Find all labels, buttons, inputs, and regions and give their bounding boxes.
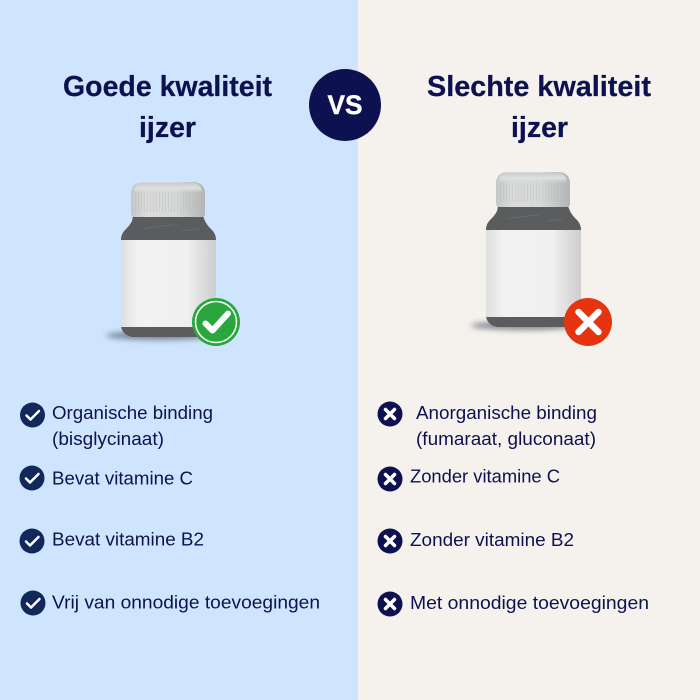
item: organic binding: (bisglycinaat)	[52, 429, 164, 449]
item: no vitamin B2: Zonder vitamine B2	[410, 530, 574, 550]
heading: good quality	[63, 71, 272, 144]
list: good quality points	[20, 402, 320, 616]
heading: good quality: Goede kwaliteit	[63, 71, 272, 103]
item: with unnecessary additives: Met onnodige toevoegingen	[410, 593, 649, 613]
item: inorganic binding	[378, 402, 597, 449]
item: vitamin C: Bevat vitamine C	[52, 468, 193, 488]
heading: bad quality: ijzer	[511, 112, 568, 144]
item: organic binding	[20, 402, 213, 449]
item: organic binding: Organische binding	[52, 403, 213, 423]
heading: good quality: ijzer	[139, 112, 196, 144]
badge: VS	[309, 69, 381, 141]
heading: bad quality: Slechte kwaliteit	[427, 71, 651, 103]
panel: good quality background	[0, 0, 358, 700]
item: no unnecessary additives: Vrij van onnodige toevoegingen	[52, 592, 320, 612]
icon: green check badge	[192, 298, 240, 346]
item: inorganic binding: Anorganische binding	[416, 403, 597, 423]
heading: bad quality	[427, 71, 651, 144]
icon: red cross badge	[564, 298, 612, 346]
item: no vitamin C	[378, 466, 560, 492]
list: bad quality points	[378, 402, 649, 616]
item: vitamin B2: Bevat vitamine B2	[52, 530, 204, 550]
panel: bad quality background	[358, 0, 700, 700]
icon: bad quality bottle	[471, 172, 581, 330]
icon: good quality bottle	[106, 182, 216, 340]
item: vitamin B2	[20, 528, 204, 554]
badge: VS: VS	[328, 90, 362, 120]
item: vitamin C	[20, 466, 193, 490]
item: no vitamin C: Zonder vitamine C	[410, 466, 560, 486]
item: inorganic binding: (fumaraat, gluconaat)	[416, 429, 596, 449]
item: no vitamin B2	[378, 528, 574, 554]
item: no unnecessary additives	[20, 590, 320, 616]
item: with unnecessary additives	[378, 592, 649, 616]
